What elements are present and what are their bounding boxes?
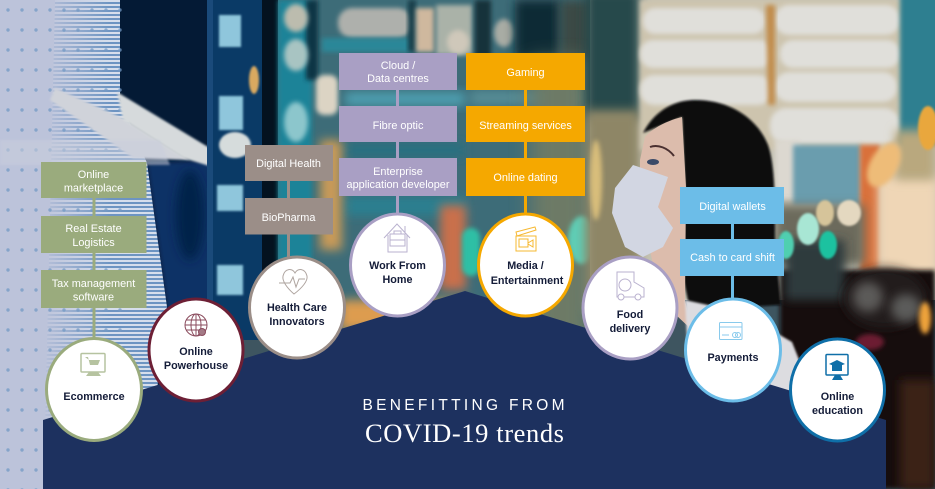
circle: Online Powerhouse: Online [179,346,213,358]
box: Streaming services: Streaming services [479,120,572,132]
icon: credit card [720,322,742,340]
circle: Health Care Innovators: Innovators [269,316,325,328]
icon: delivery truck with apple [617,272,644,300]
circle: Ecommerce [46,338,142,440]
box: Digital wallets: Digital wallets [699,201,766,213]
branch: Payments [680,187,784,401]
box: Enterprise application developer: Enterprise [373,166,423,178]
icon: shopping cart on monitor [81,354,105,376]
circle: Online Powerhouse: Powerhouse [164,360,228,372]
icon: monitor with graduation cap [826,354,848,380]
box: Digital wallets [680,187,784,224]
circle: Work From Home: Work From [369,260,426,272]
icon: heart with pulse [279,270,307,294]
box: Tax management software: software [73,292,114,304]
photo: right blurred signs [585,0,935,489]
circle: Media / Entertainment: Media / [507,260,544,272]
box: Cloud / Data centres: Data centres [367,73,429,85]
circle: Online education [790,339,884,441]
icon: globe [185,314,207,336]
box: Fibre optic [339,106,457,142]
box: Online marketplace: marketplace [64,182,123,194]
box: Streaming services [466,106,585,142]
box: Cash to card shift [680,239,784,276]
circle: Online education: Online [821,391,854,403]
icon: clapperboard with camera [516,227,536,251]
box: Gaming: Gaming [506,67,545,79]
photo: woman [612,100,815,400]
box: Online marketplace [41,162,146,198]
box: Online marketplace: Online [78,169,109,181]
circle: Media / Entertainment: Entertainment [491,275,564,287]
title line 1: BENEFITTING FROM [362,397,564,414]
box: Real Estate Logistics: Logistics [72,237,115,249]
box: Fibre optic: Fibre optic [373,120,424,132]
circle: Health Care Innovators: Health Care [267,302,327,314]
box: Online dating: Online dating [493,172,558,184]
branch: Work From Home [339,53,457,316]
circle: Payments: Payments [707,352,759,364]
branch: Media / Entertainment [466,53,585,316]
box: BioPharma [245,198,333,234]
branch: Ecommerce [41,162,146,440]
circle: Food delivery [583,257,677,359]
circle: Health Care Innovators [250,257,344,358]
circle: Online education: education [812,405,863,417]
box: Real Estate Logistics [41,216,146,253]
box: Cloud / Data centres: Cloud / [381,60,416,72]
title [362,397,564,448]
photo: blurred centre lights [278,0,596,489]
navy title panel [43,291,886,489]
box: Cloud / Data centres [339,53,457,90]
circle: Work From Home: Home [382,274,412,286]
box: Enterprise application developer: application developer [347,179,450,191]
box: BioPharma: BioPharma [262,212,316,224]
circle: Food delivery: delivery [610,323,650,335]
box: Real Estate Logistics: Real Estate [65,223,122,235]
circle: Food delivery: Food [617,309,643,321]
box: Tax management software [41,270,146,308]
box: Enterprise application developer [339,158,457,196]
box: Digital Health: Digital Health [256,158,321,170]
circle: Work From Home [350,214,444,316]
box: Online dating [466,158,585,196]
title line 2: COVID-19 trends [365,418,564,448]
box: Tax management software: Tax management [52,278,135,290]
circle: Media / Entertainment [478,214,572,316]
circle: Payments [686,299,780,401]
photo: left data screen [0,0,279,489]
branch: Health Care Innovators [245,145,344,358]
box: Cash to card shift: Cash to card shift [690,252,775,264]
circle: Ecommerce: Ecommerce [63,391,125,403]
box: Digital Health [245,145,333,181]
circle: Online Powerhouse [149,299,243,401]
icon: house with briefcase [384,224,410,252]
box: Gaming [466,53,585,90]
